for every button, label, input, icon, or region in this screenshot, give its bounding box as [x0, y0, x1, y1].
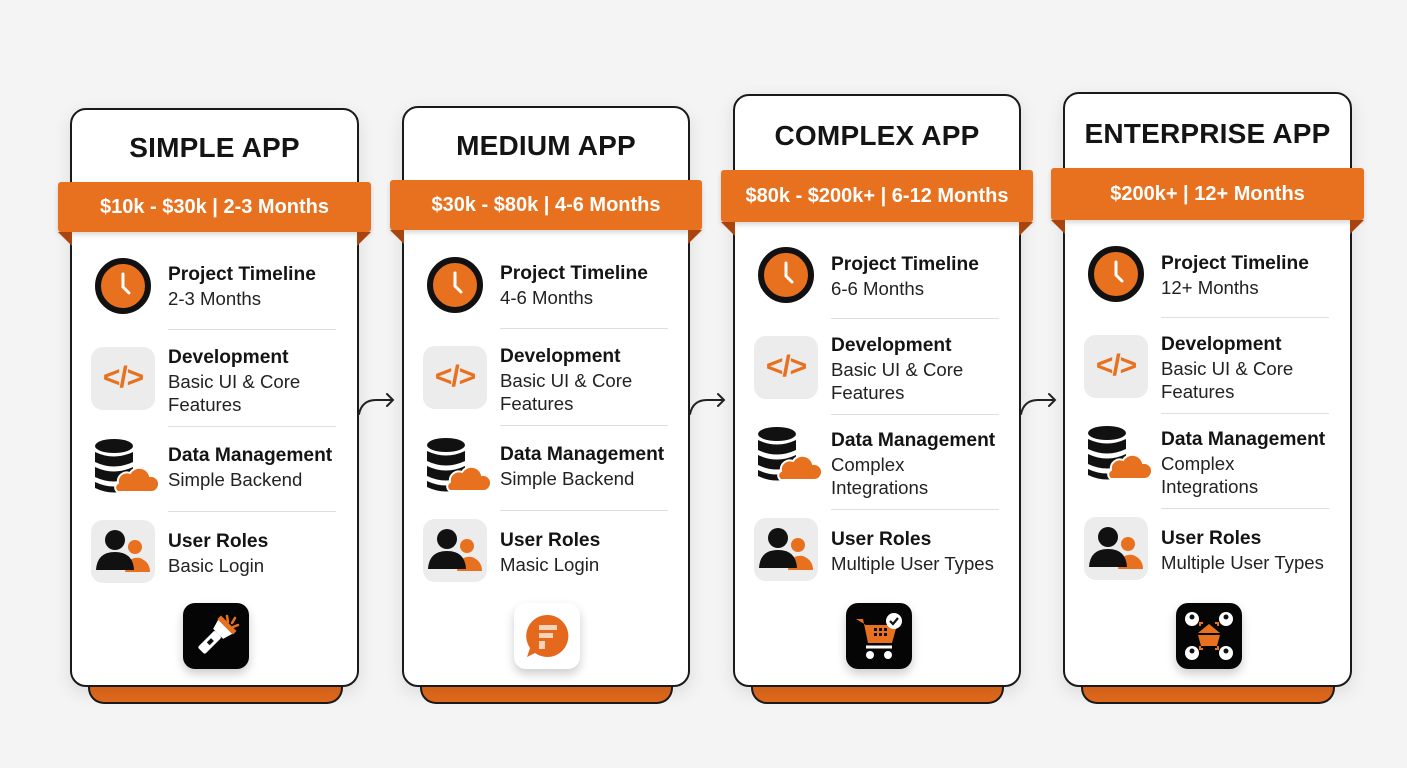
- heading: COMPLEX APP: [775, 120, 979, 151]
- text: data: [831, 430, 995, 498]
- text: users: [168, 531, 268, 576]
- arrow 3: [1021, 393, 1056, 415]
- icon: database: [1088, 426, 1151, 480]
- text: timeline: [168, 264, 316, 308]
- text: data: Integrations: [1161, 476, 1258, 497]
- text: timeline: Project Timeline: [1161, 253, 1309, 274]
- text: development: Basic UI & Core: [831, 358, 963, 380]
- text: users: Multiple User Types: [1161, 552, 1324, 572]
- heading: ENTERPRISE APP: [1084, 118, 1331, 149]
- icon: code: [1084, 335, 1148, 398]
- card: enterprise app: [1063, 92, 1352, 687]
- icon: code: </>: [1096, 349, 1136, 382]
- text: data: [168, 445, 332, 490]
- text: timeline: Project Timeline: [831, 254, 979, 275]
- icon: clock: [758, 247, 814, 303]
- text: data: Data Management: [831, 430, 995, 451]
- text: timeline: [1161, 253, 1309, 298]
- text: development: Development: [831, 335, 951, 356]
- heading: MEDIUM APP: [456, 130, 636, 161]
- text: development: Basic UI & Core: [500, 370, 632, 390]
- ribbon: price: [1051, 168, 1364, 220]
- ribbon: price: $10k - $30k | 2-3 Months: [100, 196, 329, 218]
- text: timeline: Project Timeline: [168, 264, 316, 285]
- icon: users: [91, 520, 155, 583]
- ribbon: price: $200k+ | 12+ Months: [1110, 183, 1305, 205]
- text: data: Data Management: [168, 445, 332, 466]
- ribbon: price: $30k - $80k | 4-6 Months: [431, 194, 661, 216]
- icon: clock: [1088, 246, 1144, 302]
- text: users: [1161, 528, 1324, 573]
- icon: database: [427, 438, 490, 492]
- icon: code: </>: [435, 360, 475, 393]
- text: development: [1161, 334, 1293, 402]
- bases: [88, 678, 343, 704]
- text: development: [500, 346, 632, 414]
- text: users: [831, 529, 994, 574]
- icon: clock: [427, 257, 483, 313]
- icon: code: [754, 336, 818, 399]
- text: users: User Roles: [168, 531, 268, 552]
- icon: users: [1084, 517, 1148, 580]
- icon: code: [91, 347, 155, 410]
- heading: SIMPLE APP: [129, 132, 300, 163]
- ribbon: price: [721, 170, 1033, 222]
- text: timeline: 4-6 Months: [500, 286, 593, 308]
- card: medium app: [402, 106, 690, 687]
- icon: code: </>: [766, 350, 806, 383]
- text: development: [831, 335, 963, 403]
- text: data: Data Management: [500, 444, 664, 465]
- text: timeline: 2-3 Months: [168, 288, 261, 308]
- text: development: Features: [168, 394, 241, 415]
- icon: code: </>: [103, 361, 143, 394]
- text: users: User Roles: [1161, 528, 1261, 549]
- icon: code: [423, 346, 487, 409]
- text: timeline: 12+ Months: [1161, 276, 1259, 298]
- text: development: Development: [500, 346, 620, 367]
- text: development: [168, 347, 300, 415]
- text: development: Features: [500, 393, 573, 414]
- text: development: Development: [1161, 334, 1281, 355]
- text: users: User Roles: [500, 530, 600, 551]
- arrow 2: [690, 393, 726, 415]
- arrow 1: [359, 393, 394, 415]
- text: timeline: Project Timeline: [500, 263, 648, 284]
- text: data: Data Management: [1161, 429, 1325, 450]
- text: data: [500, 444, 664, 489]
- ribbon: price: [390, 180, 702, 230]
- icon: database: [95, 439, 158, 492]
- ribbon: price: [58, 182, 371, 232]
- icon: flashlight: [183, 603, 249, 669]
- text: development: Features: [1161, 381, 1234, 402]
- text: users: User Roles: [831, 529, 931, 550]
- text: data: Complex: [831, 454, 904, 474]
- card: simple app: [70, 108, 359, 687]
- text: data: Integrations: [831, 477, 928, 498]
- text: timeline: [831, 254, 979, 298]
- text: users: Multiple User Types: [831, 552, 994, 574]
- icon: users: [754, 518, 818, 581]
- text: timeline: [500, 263, 648, 308]
- card: complex app: [733, 94, 1021, 687]
- text: users: Basic Login: [168, 554, 264, 576]
- icon: cart: [846, 603, 912, 669]
- text: data: Simple Backend: [168, 468, 302, 490]
- text: development: Features: [831, 382, 904, 403]
- text: development: Development: [168, 347, 288, 368]
- ribbon: price: $80k - $200k+ | 6-12 Months: [746, 185, 1008, 207]
- text: data: Simple Backend: [500, 468, 634, 488]
- icon: chat F: [514, 603, 580, 669]
- text: development: Basic UI & Core: [168, 370, 300, 392]
- icon: team basket: [1176, 603, 1242, 669]
- text: data: [1161, 429, 1325, 497]
- icon: database: [758, 427, 821, 480]
- icon: users: [423, 519, 487, 582]
- text: timeline: 6-6 Months: [831, 278, 924, 298]
- text: users: Masic Login: [500, 554, 599, 574]
- text: development: Basic UI & Core: [1161, 358, 1293, 378]
- text: data: Complex: [1161, 452, 1234, 474]
- icon: clock: [95, 258, 151, 314]
- text: users: [500, 530, 600, 575]
